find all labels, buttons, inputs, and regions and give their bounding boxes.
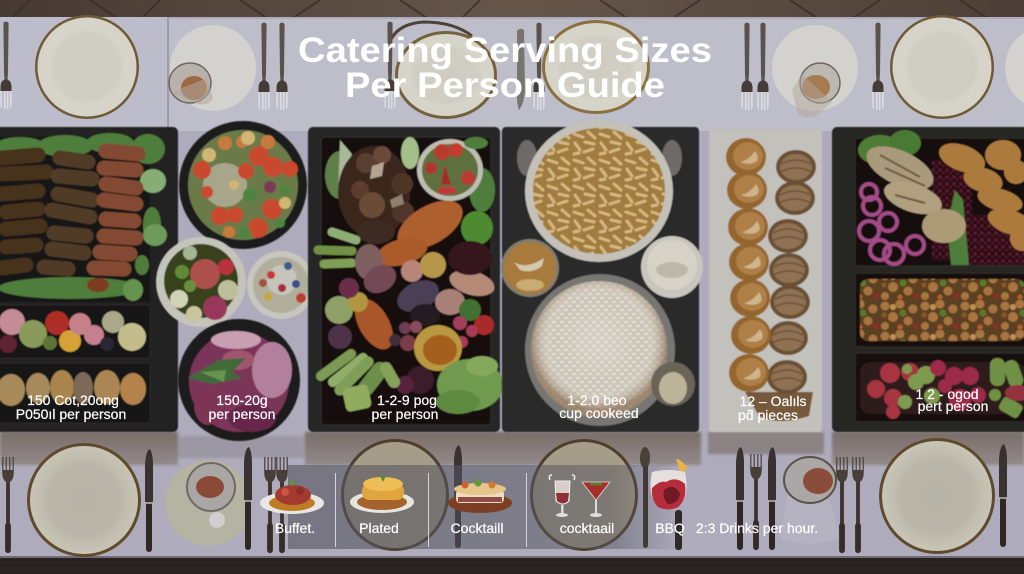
lettuce <box>436 356 503 414</box>
side plate with glass <box>169 25 256 111</box>
label: plated: Plated <box>359 520 399 536</box>
panel: bread board <box>709 129 822 432</box>
beets and greens <box>858 130 1024 265</box>
panel: right tray <box>832 127 1024 432</box>
bottom place settings <box>2 438 1007 557</box>
label: center platter serving: 1-2-9 pog <box>377 392 437 408</box>
label: left tray serving: P050ıl per person <box>16 406 126 422</box>
grilled chicken <box>860 137 966 243</box>
center knife and fork <box>517 22 545 110</box>
berries <box>389 316 478 394</box>
charcuterie <box>325 241 497 349</box>
lime and salad bowl <box>401 137 495 212</box>
label: bowl serving: per person <box>209 406 275 422</box>
icon: cocktail platter <box>448 480 512 513</box>
label: right tray serving <box>915 386 988 414</box>
green block <box>342 384 372 412</box>
vegetable bowl <box>156 237 246 327</box>
icon: cocktail glasses <box>549 475 610 517</box>
label: bread serving: 12 – Oalıls <box>740 393 806 409</box>
plate top left <box>35 15 139 119</box>
top right setting <box>741 22 884 118</box>
label: buffet: Buffet. <box>275 520 315 536</box>
orange slice <box>414 325 462 371</box>
label: bowl serving: 150-20g <box>216 392 268 408</box>
shadows cast by trays <box>0 432 1024 465</box>
mixed bowl <box>247 251 315 319</box>
right glass <box>780 457 840 544</box>
fruit row <box>0 309 146 353</box>
mixed vegetables <box>860 279 1024 341</box>
green pepper <box>461 211 493 245</box>
panel: left meat tray <box>0 127 178 432</box>
center right plate <box>542 20 650 114</box>
label: BBQ: BBQ <box>655 520 685 536</box>
bread rolls <box>0 370 146 406</box>
cucumbers top <box>318 232 356 264</box>
cucumber spears <box>321 354 394 390</box>
right dinner plate <box>879 438 995 554</box>
plate far right <box>1005 25 1024 111</box>
left dinner plate <box>27 443 141 557</box>
meat <box>338 146 414 244</box>
label: bread serving <box>738 393 806 423</box>
label: right tray serving: pert person <box>918 398 988 414</box>
label: drinks per hour: 2:3 Drinks per hour. <box>696 520 818 536</box>
right knife <box>999 444 1007 547</box>
left lettuce <box>325 140 355 199</box>
left fork <box>2 457 14 553</box>
title: Catering Serving Sizes <box>298 30 712 70</box>
red onions <box>859 184 924 264</box>
center plates <box>341 439 650 551</box>
panel: pasta and rice tray <box>501 120 703 432</box>
top place settings <box>0 15 1024 119</box>
label: bowl serving <box>209 392 275 422</box>
sauce bowl <box>501 239 559 297</box>
legend bar <box>288 465 683 549</box>
small side bowl <box>651 362 695 406</box>
left knife <box>145 449 153 552</box>
cutlery group <box>244 447 288 553</box>
plate top right <box>890 15 994 119</box>
label: pasta and rice serving: 1-2.0 beo <box>567 392 627 408</box>
right forks <box>836 457 864 553</box>
red and green fruit <box>860 358 1024 419</box>
label: right tray serving: 1 2 - ogod <box>915 386 979 402</box>
label: center platter serving: per person <box>372 406 438 422</box>
icon: plated dish <box>350 476 414 513</box>
right cutlery <box>675 447 776 550</box>
panel: center platter <box>308 127 503 432</box>
greens <box>0 133 167 301</box>
pink salad bowl <box>178 319 300 441</box>
side plate with glass <box>165 460 251 546</box>
salad bowl <box>179 121 307 249</box>
croissants <box>935 138 1024 251</box>
cream bowl <box>641 236 703 298</box>
title <box>298 30 712 105</box>
title: Per Person Guide <box>345 65 665 105</box>
label: pasta and rice serving: cup cookeed <box>559 405 639 421</box>
label: left tray serving: 150 Cot,20ong <box>27 392 119 408</box>
panel: bowls column <box>156 121 315 441</box>
shrimp <box>347 191 471 356</box>
label: cocktail: Cocktaill <box>451 520 503 536</box>
sausages <box>2 151 138 269</box>
label: cocktail drinks: cocktaail <box>560 520 614 536</box>
center plate with handle <box>384 22 497 119</box>
left cutlery top <box>0 22 288 110</box>
label: pasta and rice serving <box>559 392 639 421</box>
icon: red wine glass with lemon <box>650 459 688 510</box>
label: bread serving: pƌ pieces <box>738 407 798 423</box>
label: left tray serving <box>16 392 126 422</box>
label: center platter serving <box>372 392 438 422</box>
pasta pan <box>517 120 682 262</box>
rice pan <box>525 274 675 426</box>
icon: buffet plate <box>260 481 324 514</box>
